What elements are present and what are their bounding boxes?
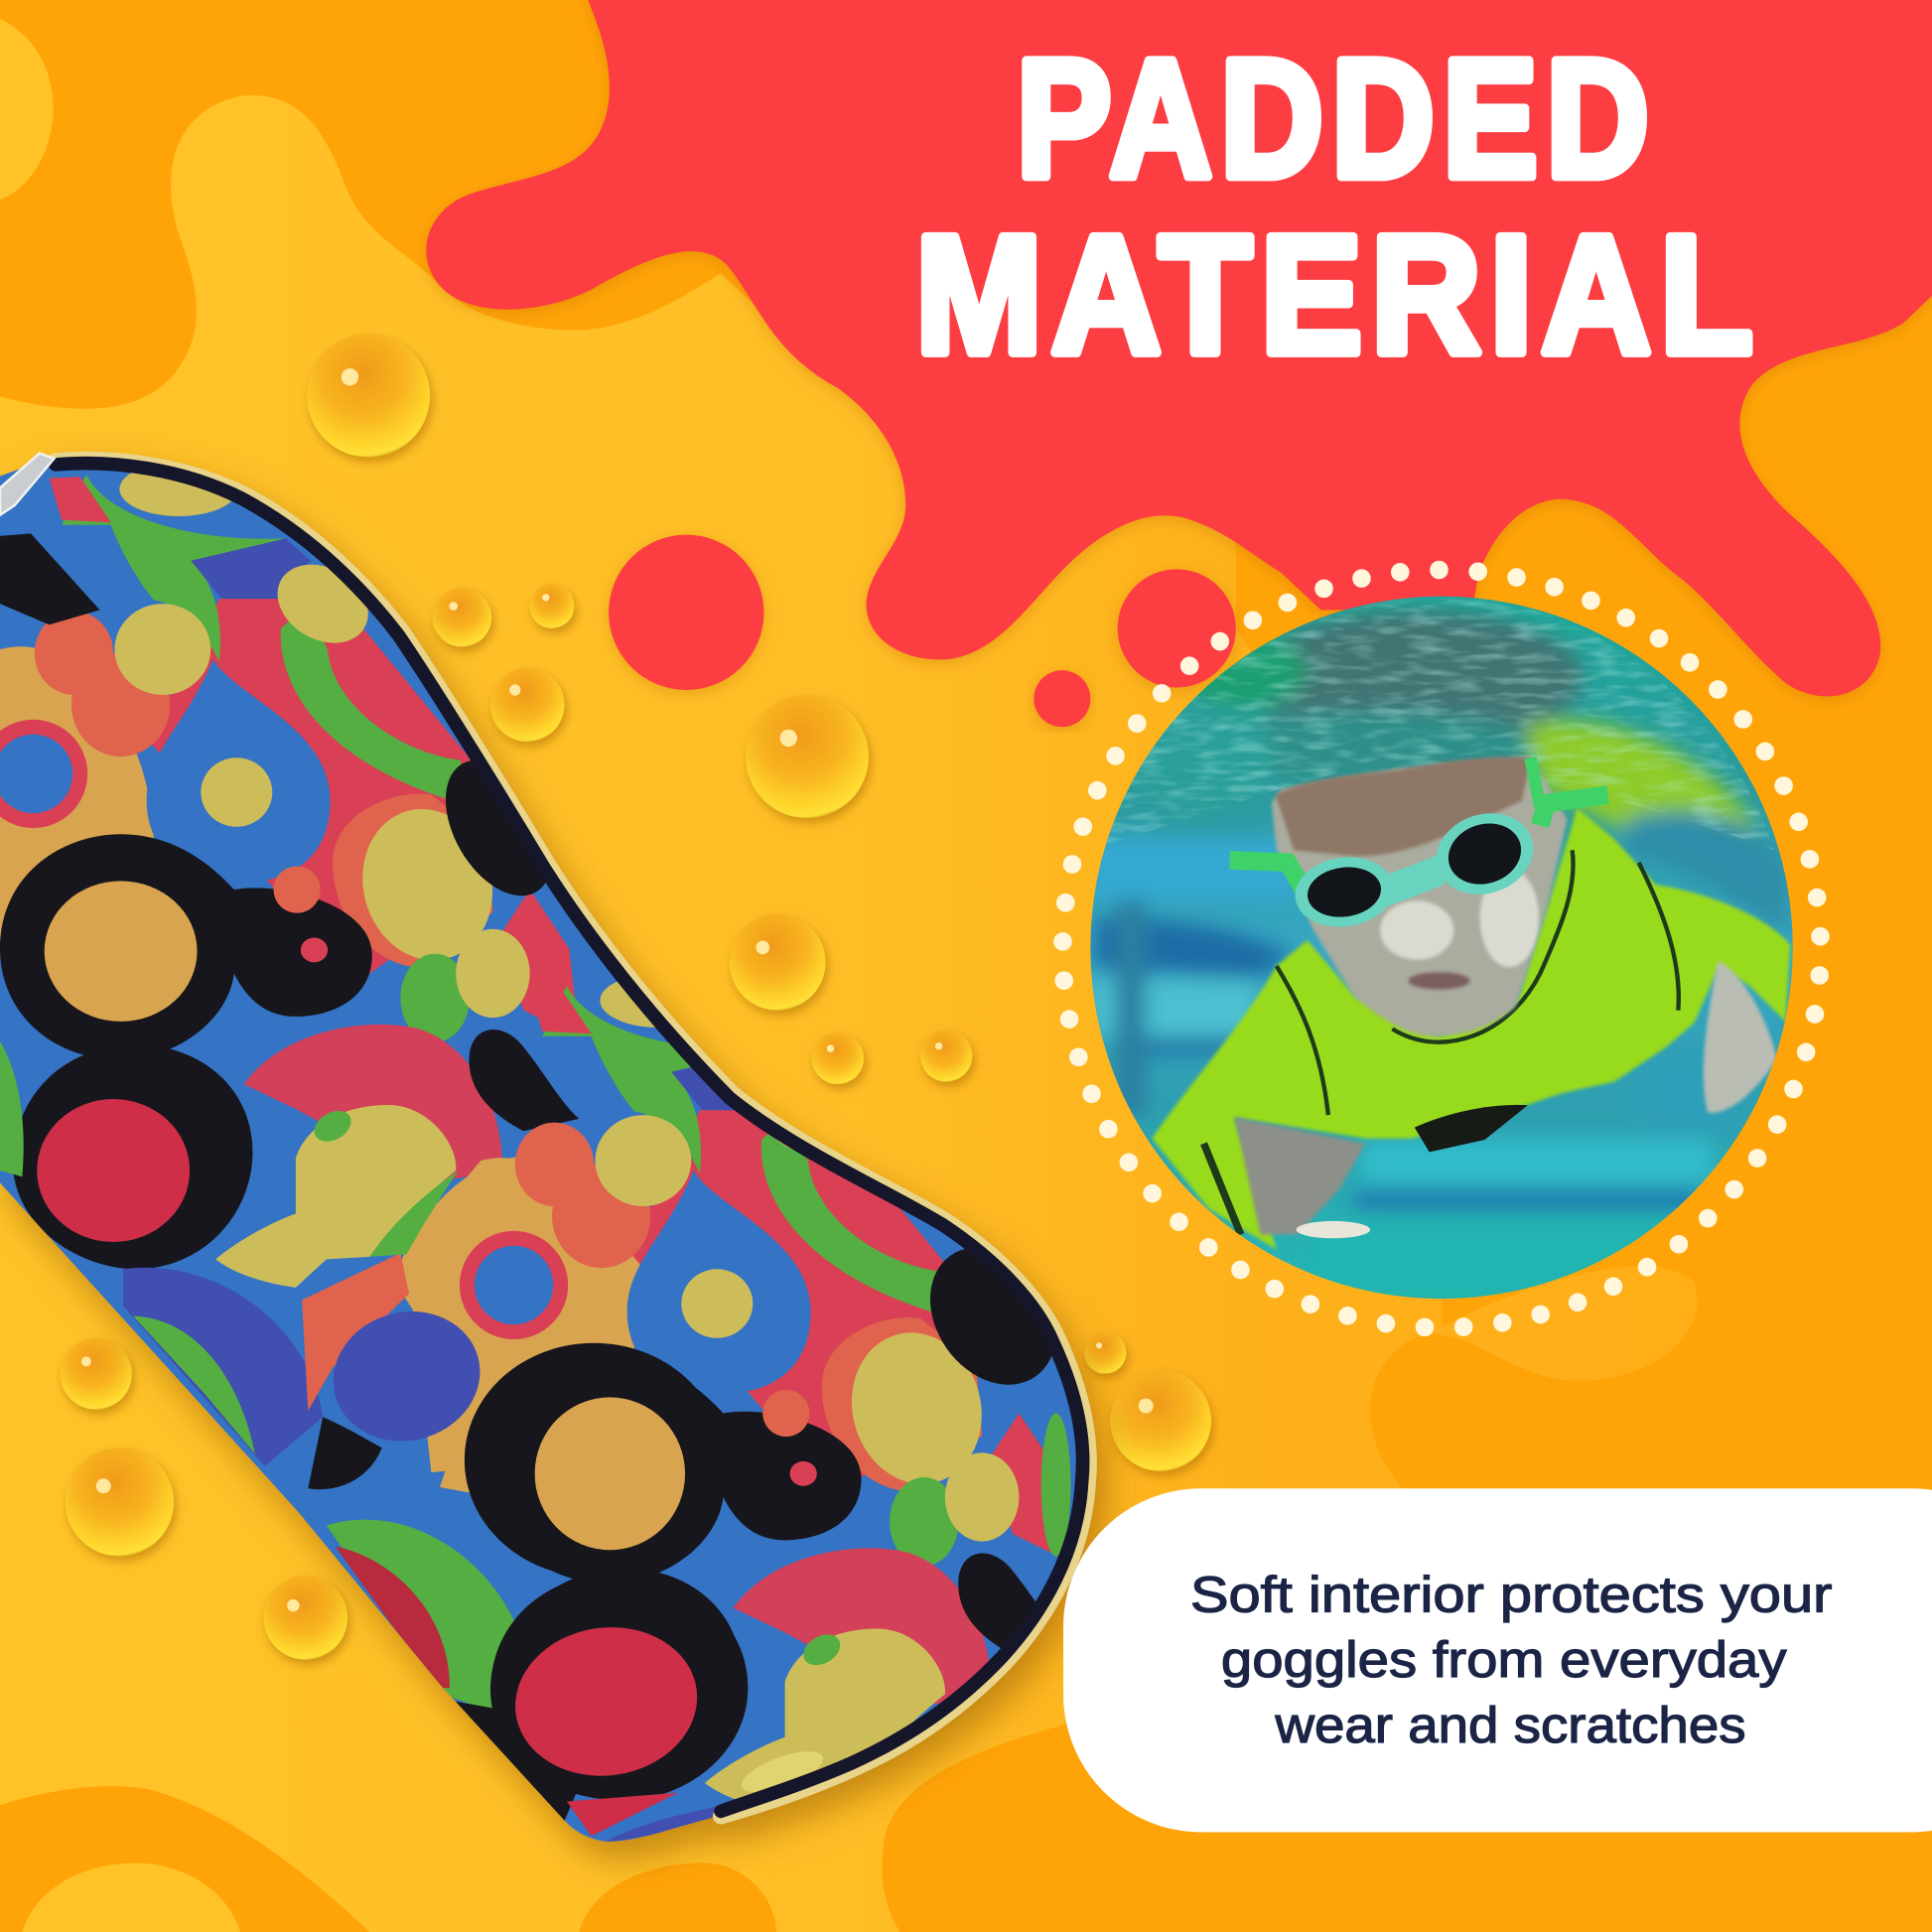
photo: right hand — [1704, 961, 1777, 1113]
red blob: large dot — [609, 535, 763, 690]
case: lower black edge blob — [929, 1249, 1052, 1385]
title: padded material: MATERIAL — [915, 201, 1762, 388]
photo: water surface — [1128, 610, 1787, 936]
photo: hair and forehead — [1276, 757, 1532, 857]
case: indigo oval — [319, 1296, 494, 1457]
background: bottom orange blob — [579, 1863, 776, 1932]
photo: left hand — [1235, 1118, 1365, 1235]
photo: dark shirt patch — [1415, 1105, 1528, 1152]
photo: face — [1272, 758, 1568, 1036]
photo: cheek highlights — [1380, 869, 1539, 967]
case: bottom yellow sliver — [737, 1743, 828, 1801]
callout text: goggles from everyday — [1221, 1631, 1787, 1688]
circular photo: child swimming underwater — [1084, 592, 1799, 1307]
background: bottom-left light blob — [22, 1863, 240, 1932]
case: right edge green — [1041, 1414, 1070, 1556]
case: lower dark red arc — [336, 1547, 450, 1688]
callout pill — [1063, 1488, 1932, 1832]
case: bottom crimson trim — [567, 1793, 678, 1836]
case: second ring tan center — [535, 1397, 685, 1550]
callout text: wear and scratches — [1274, 1697, 1746, 1753]
title: padded material — [915, 24, 1762, 388]
case: padded fabric pattern — [0, 444, 1097, 1849]
photo: lime rash guard — [1152, 808, 1790, 1249]
case: top-left black patch — [0, 533, 100, 624]
goggle case — [0, 444, 1097, 1849]
case: lower-left black edge — [450, 1701, 579, 1821]
callout text — [1190, 1566, 1833, 1753]
red blob: small dot — [1034, 670, 1090, 727]
dotted ring around photo — [1062, 570, 1821, 1327]
case: zipper rim — [56, 460, 1089, 1816]
case: second ring body — [465, 1343, 724, 1578]
background: top-left yellow blob — [0, 19, 54, 200]
callout text: Soft interior protects your — [1190, 1566, 1833, 1622]
case: upper black edge blob — [445, 760, 546, 896]
photo: mouth — [1409, 972, 1470, 990]
case: bottom indigo trim — [602, 1793, 763, 1844]
case: lower green arc — [327, 1520, 532, 1713]
background: top-right yellow blob — [1905, 136, 1932, 259]
case: lower-left indigo arc — [123, 1268, 323, 1466]
case: lower-left green arc — [133, 1315, 255, 1453]
water droplets — [61, 334, 1211, 1660]
title: padded material: PADDED — [1017, 24, 1657, 211]
case: left edge green — [0, 1041, 24, 1176]
photo: water ripple texture — [1090, 597, 1793, 855]
case: lower ring body — [490, 1573, 748, 1800]
photo: pool background bands — [1090, 838, 1737, 1307]
red paint splash — [426, 0, 1932, 696]
case: green slash — [369, 1171, 459, 1257]
red blob: dot beside photo — [1118, 569, 1236, 688]
case: lower ring red center — [505, 1615, 707, 1787]
case: tan base under second ring — [394, 1157, 653, 1497]
photo: goggles — [1230, 758, 1608, 933]
case: metal zipper pull — [0, 454, 55, 515]
photo: shirt seams — [1204, 850, 1679, 1235]
case: coral patch — [302, 1253, 409, 1411]
case: black crescent — [308, 1417, 382, 1489]
